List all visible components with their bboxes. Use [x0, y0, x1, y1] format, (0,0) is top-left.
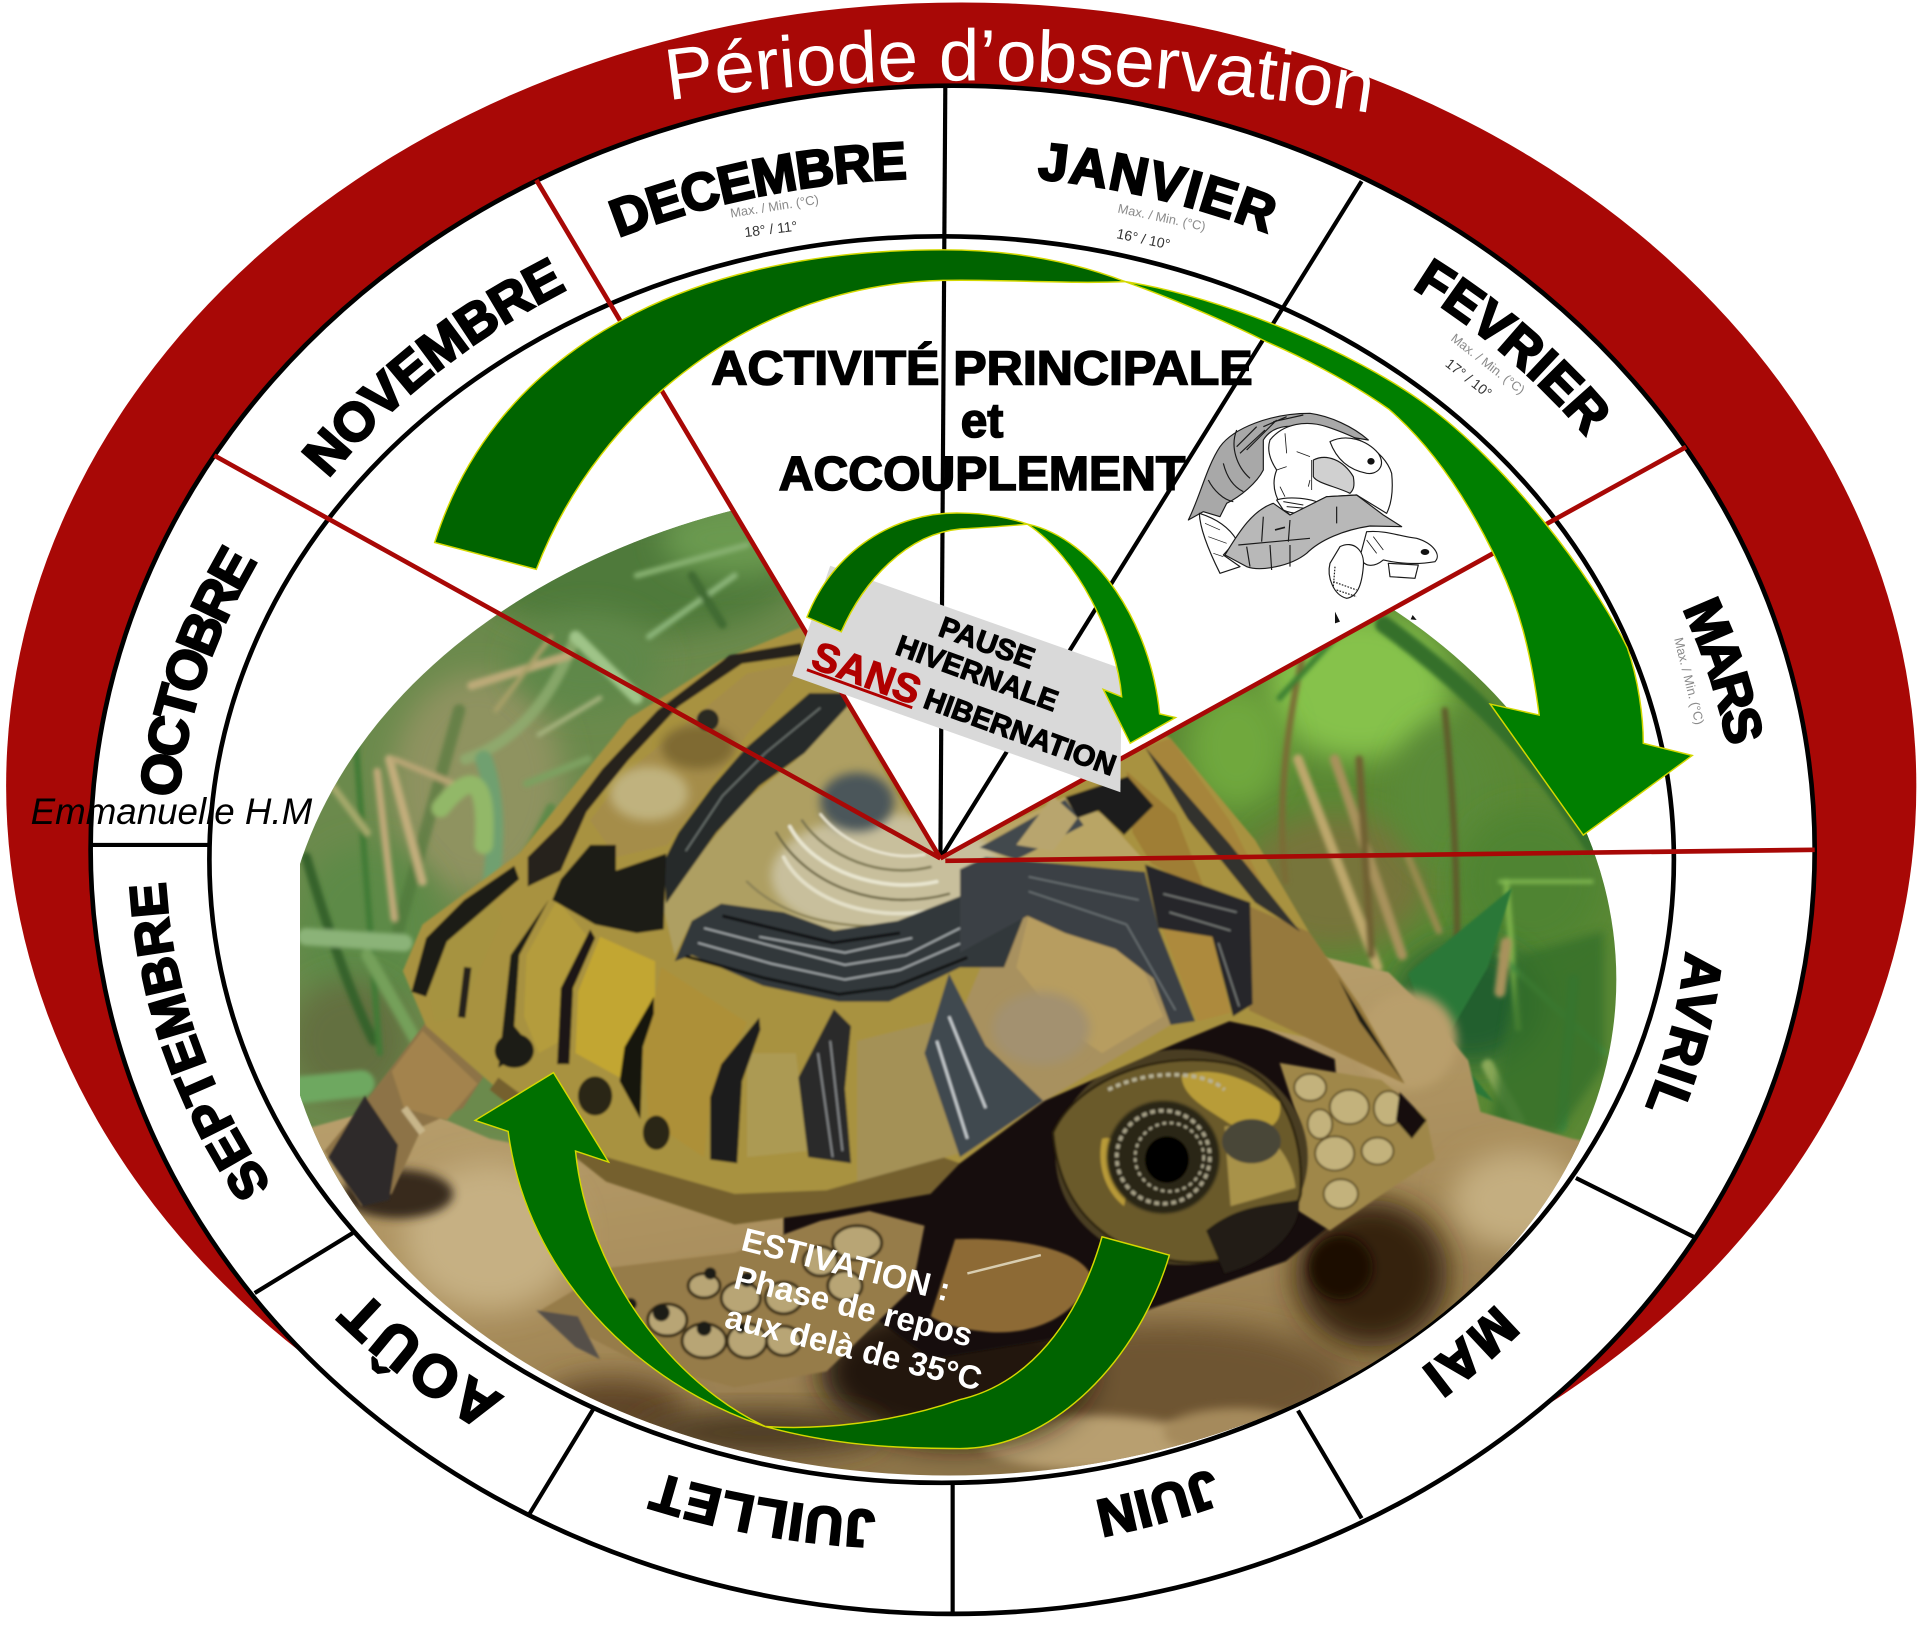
thin dark line upper	[528, 643, 803, 887]
title: Période d'observation: Période d’observation	[668, 28, 1370, 112]
temperature: janvier: Max. / Min. (°C)	[1116, 201, 1207, 234]
month: JANVIER: JANVIER	[1038, 142, 1276, 234]
month: NOVEMBRE: NOVEMBRE	[300, 256, 567, 478]
front right leg	[1280, 1063, 1435, 1231]
month: MAI: MAI	[1422, 1305, 1520, 1398]
black blob	[552, 845, 666, 933]
heading: activité principale et accouplement: ACCOUPLEMENT	[779, 448, 1185, 501]
band edge along red line	[980, 800, 1084, 860]
temperature: décembre	[729, 192, 820, 240]
temperature: décembre: Max. / Min. (°C)	[729, 192, 820, 221]
white central wedge	[661, 367, 1531, 858]
upper rear plate with pale patch	[590, 661, 808, 857]
month: JUILLET: JUILLET	[646, 1474, 876, 1548]
spokes: red period dividers	[214, 180, 1815, 861]
right diagonal streak	[1145, 747, 1300, 932]
month labels	[128, 141, 1762, 1548]
vertebral dome	[663, 706, 909, 954]
signature: Emmanuelle H.M	[31, 791, 313, 832]
rear leg	[324, 1019, 484, 1206]
month: AOÛT: AOÛT	[334, 1297, 505, 1424]
text: estivation: Phase de repos	[730, 1260, 976, 1355]
month: FEVRIER: FEVRIER	[1413, 258, 1608, 438]
icon: mating tortoises sketch	[1188, 413, 1437, 623]
heading: activité principale et accouplement	[711, 341, 1253, 501]
black blob right	[1065, 776, 1153, 835]
label: pause hivernale sans hibernation: HIBERNATION	[919, 683, 1120, 783]
temperature: mars: Max. / Min. (°C)	[1671, 636, 1707, 726]
right ochre ringed plate	[978, 796, 1141, 864]
right ochre plates	[964, 916, 1171, 1105]
broad leaf right	[1408, 888, 1512, 1102]
temperature: décembre: 18° / 11°	[743, 218, 798, 240]
month: JUIN: JUIN	[1096, 1471, 1215, 1538]
photo: tortoise on sand with grass	[269, 465, 1641, 1518]
temperature: février: 17° / 10°	[1442, 355, 1495, 401]
arrow: winter pause arc	[807, 513, 1176, 743]
dark growth spot	[820, 773, 894, 831]
month: OCTOBRE: OCTOBRE	[140, 544, 258, 795]
month: DECEMBRE: DECEMBRE	[608, 141, 906, 238]
inner disc	[209, 236, 1674, 1483]
rear stripes	[411, 866, 519, 997]
underside rim	[490, 1078, 960, 1224]
big central hex band	[674, 896, 1024, 1003]
grass background right	[1165, 610, 1616, 1164]
temperature: janvier: 16° / 10°	[1115, 225, 1172, 252]
right main band	[960, 857, 1195, 1025]
label: pause hivernale sans hibernation: PAUSE	[935, 611, 1039, 676]
text: estivation: ESTIVATION :	[738, 1222, 954, 1309]
month: MARS: MARS	[1682, 596, 1762, 744]
yellow scutes left	[576, 937, 655, 1078]
right dark band	[1145, 864, 1253, 1016]
arrow: large activity arc	[435, 250, 1692, 835]
front left scaly foot	[536, 1211, 924, 1387]
month: SEPTEMBRE: SEPTEMBRE	[128, 882, 268, 1200]
shell base	[402, 626, 1309, 1194]
temperature: janvier	[1115, 201, 1207, 252]
heading: activité principale et accouplement: et	[961, 395, 1003, 448]
text: estivation: aux delà de 35°C	[721, 1299, 985, 1398]
text: estivation	[721, 1222, 985, 1398]
label: pause hivernale sans hibernation	[792, 566, 1122, 792]
month: AVRIL: AVRIL	[1644, 951, 1722, 1110]
black band upper	[664, 693, 847, 904]
plastron	[931, 1239, 1090, 1332]
head	[1053, 1049, 1308, 1273]
dark cavity under shell	[784, 1016, 1347, 1359]
spokes: black month dividers	[91, 86, 1693, 1614]
lower centre band	[924, 973, 1043, 1157]
growth rings	[747, 814, 967, 926]
label: pause hivernale sans hibernation: HIVERNALE	[892, 629, 1062, 718]
shell	[403, 612, 1404, 1224]
sand ground	[312, 956, 1580, 1476]
temperature: février: Max. / Min. (°C)	[1448, 330, 1528, 397]
arrow: estivation arc	[475, 1073, 1169, 1449]
grass background left	[300, 510, 801, 1224]
heading: activité principale et accouplement: ACTIVITÉ PRINCIPALE	[711, 341, 1253, 395]
label: pause hivernale sans hibernation: SANS	[806, 632, 927, 714]
temperatures	[729, 192, 1707, 726]
